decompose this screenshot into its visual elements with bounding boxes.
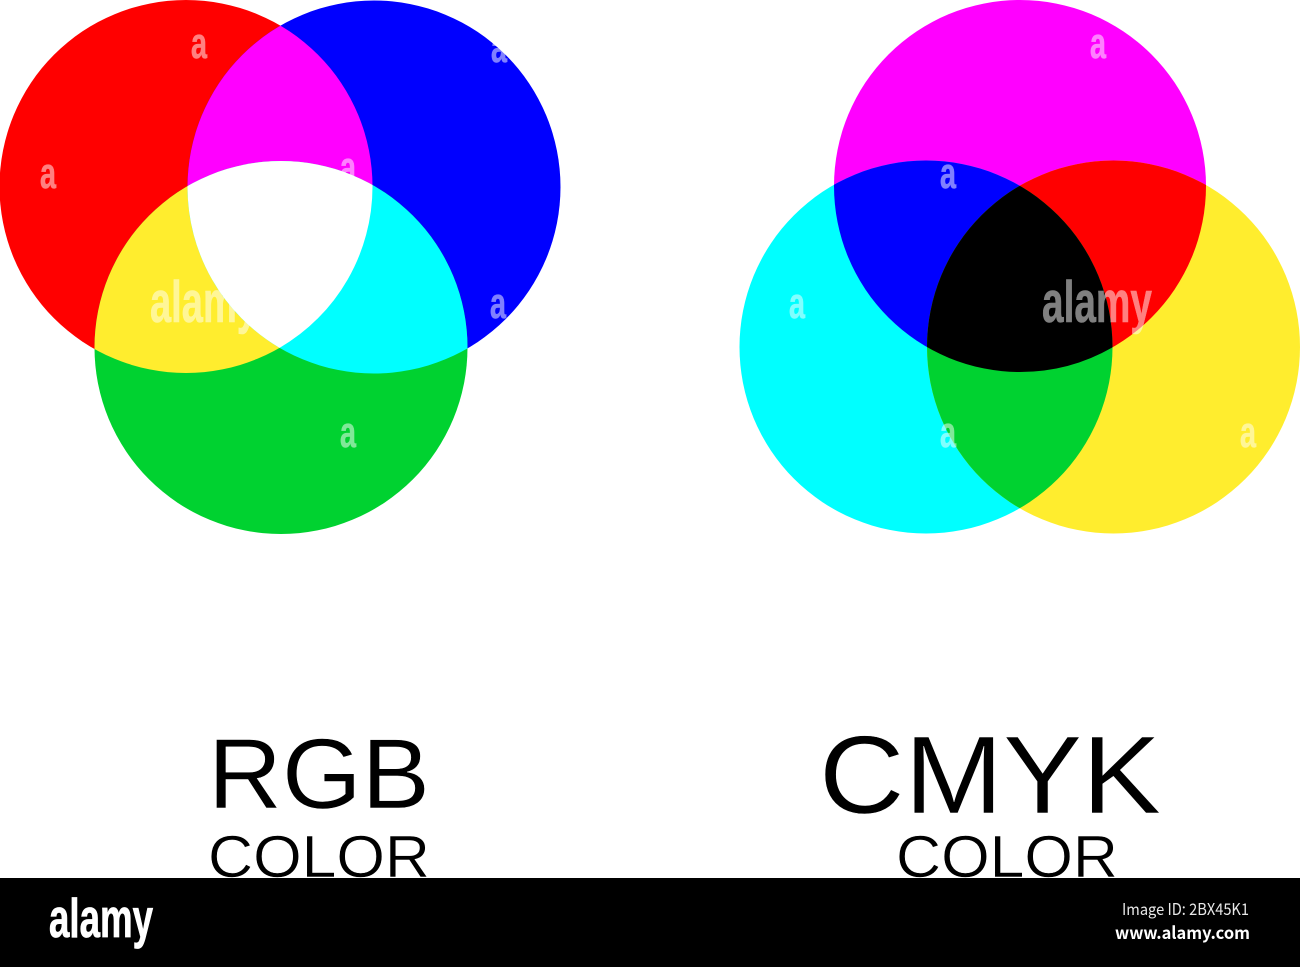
circle: green xyxy=(94,161,468,534)
circle: magenta xyxy=(834,0,1206,372)
overlap: yellow xyxy=(94,161,372,373)
subheading: CMYK COLOR: COLOR xyxy=(896,824,1118,890)
overlap: magenta xyxy=(188,26,372,186)
watermarks: a xyxy=(1240,408,1256,457)
watermarks: a xyxy=(340,408,356,457)
panel: RGB additive diagram xyxy=(0,0,560,534)
watermarks: a xyxy=(490,279,506,328)
image id: Image ID: 2BX45K1 xyxy=(1122,896,1249,920)
watermarks: a xyxy=(40,149,56,198)
footer bar xyxy=(0,878,1300,967)
overlap: red xyxy=(927,160,1206,348)
overlap: black centre xyxy=(927,186,1112,372)
overlap: green xyxy=(927,186,1112,508)
circle: blue xyxy=(188,0,560,374)
panel: CMYK subtractive diagram xyxy=(740,0,1300,534)
watermarks: a xyxy=(940,408,956,457)
circle: yellow xyxy=(927,160,1300,534)
watermarks xyxy=(40,19,1256,457)
watermarks: alamy xyxy=(1042,270,1152,335)
overlap: white centre xyxy=(188,161,372,348)
circle: red xyxy=(0,0,372,373)
watermarks: a xyxy=(940,149,956,198)
watermarks: a xyxy=(340,143,356,192)
watermarks: a xyxy=(789,279,805,328)
watermarks: a xyxy=(191,19,207,68)
heading: CMYK: CMYK xyxy=(819,714,1161,837)
watermarks: alamy xyxy=(150,270,258,335)
watermarks: a xyxy=(1090,19,1106,68)
heading: RGB: RGB xyxy=(208,718,430,829)
footer logo: alamy xyxy=(49,887,153,949)
website: www.alamy.com xyxy=(1115,919,1250,944)
watermarks: a xyxy=(491,23,507,72)
subheading: RGB COLOR: COLOR xyxy=(208,824,430,890)
circle: cyan xyxy=(740,160,1112,534)
overlap: cyan xyxy=(188,161,468,374)
overlap: blue xyxy=(834,160,1020,347)
